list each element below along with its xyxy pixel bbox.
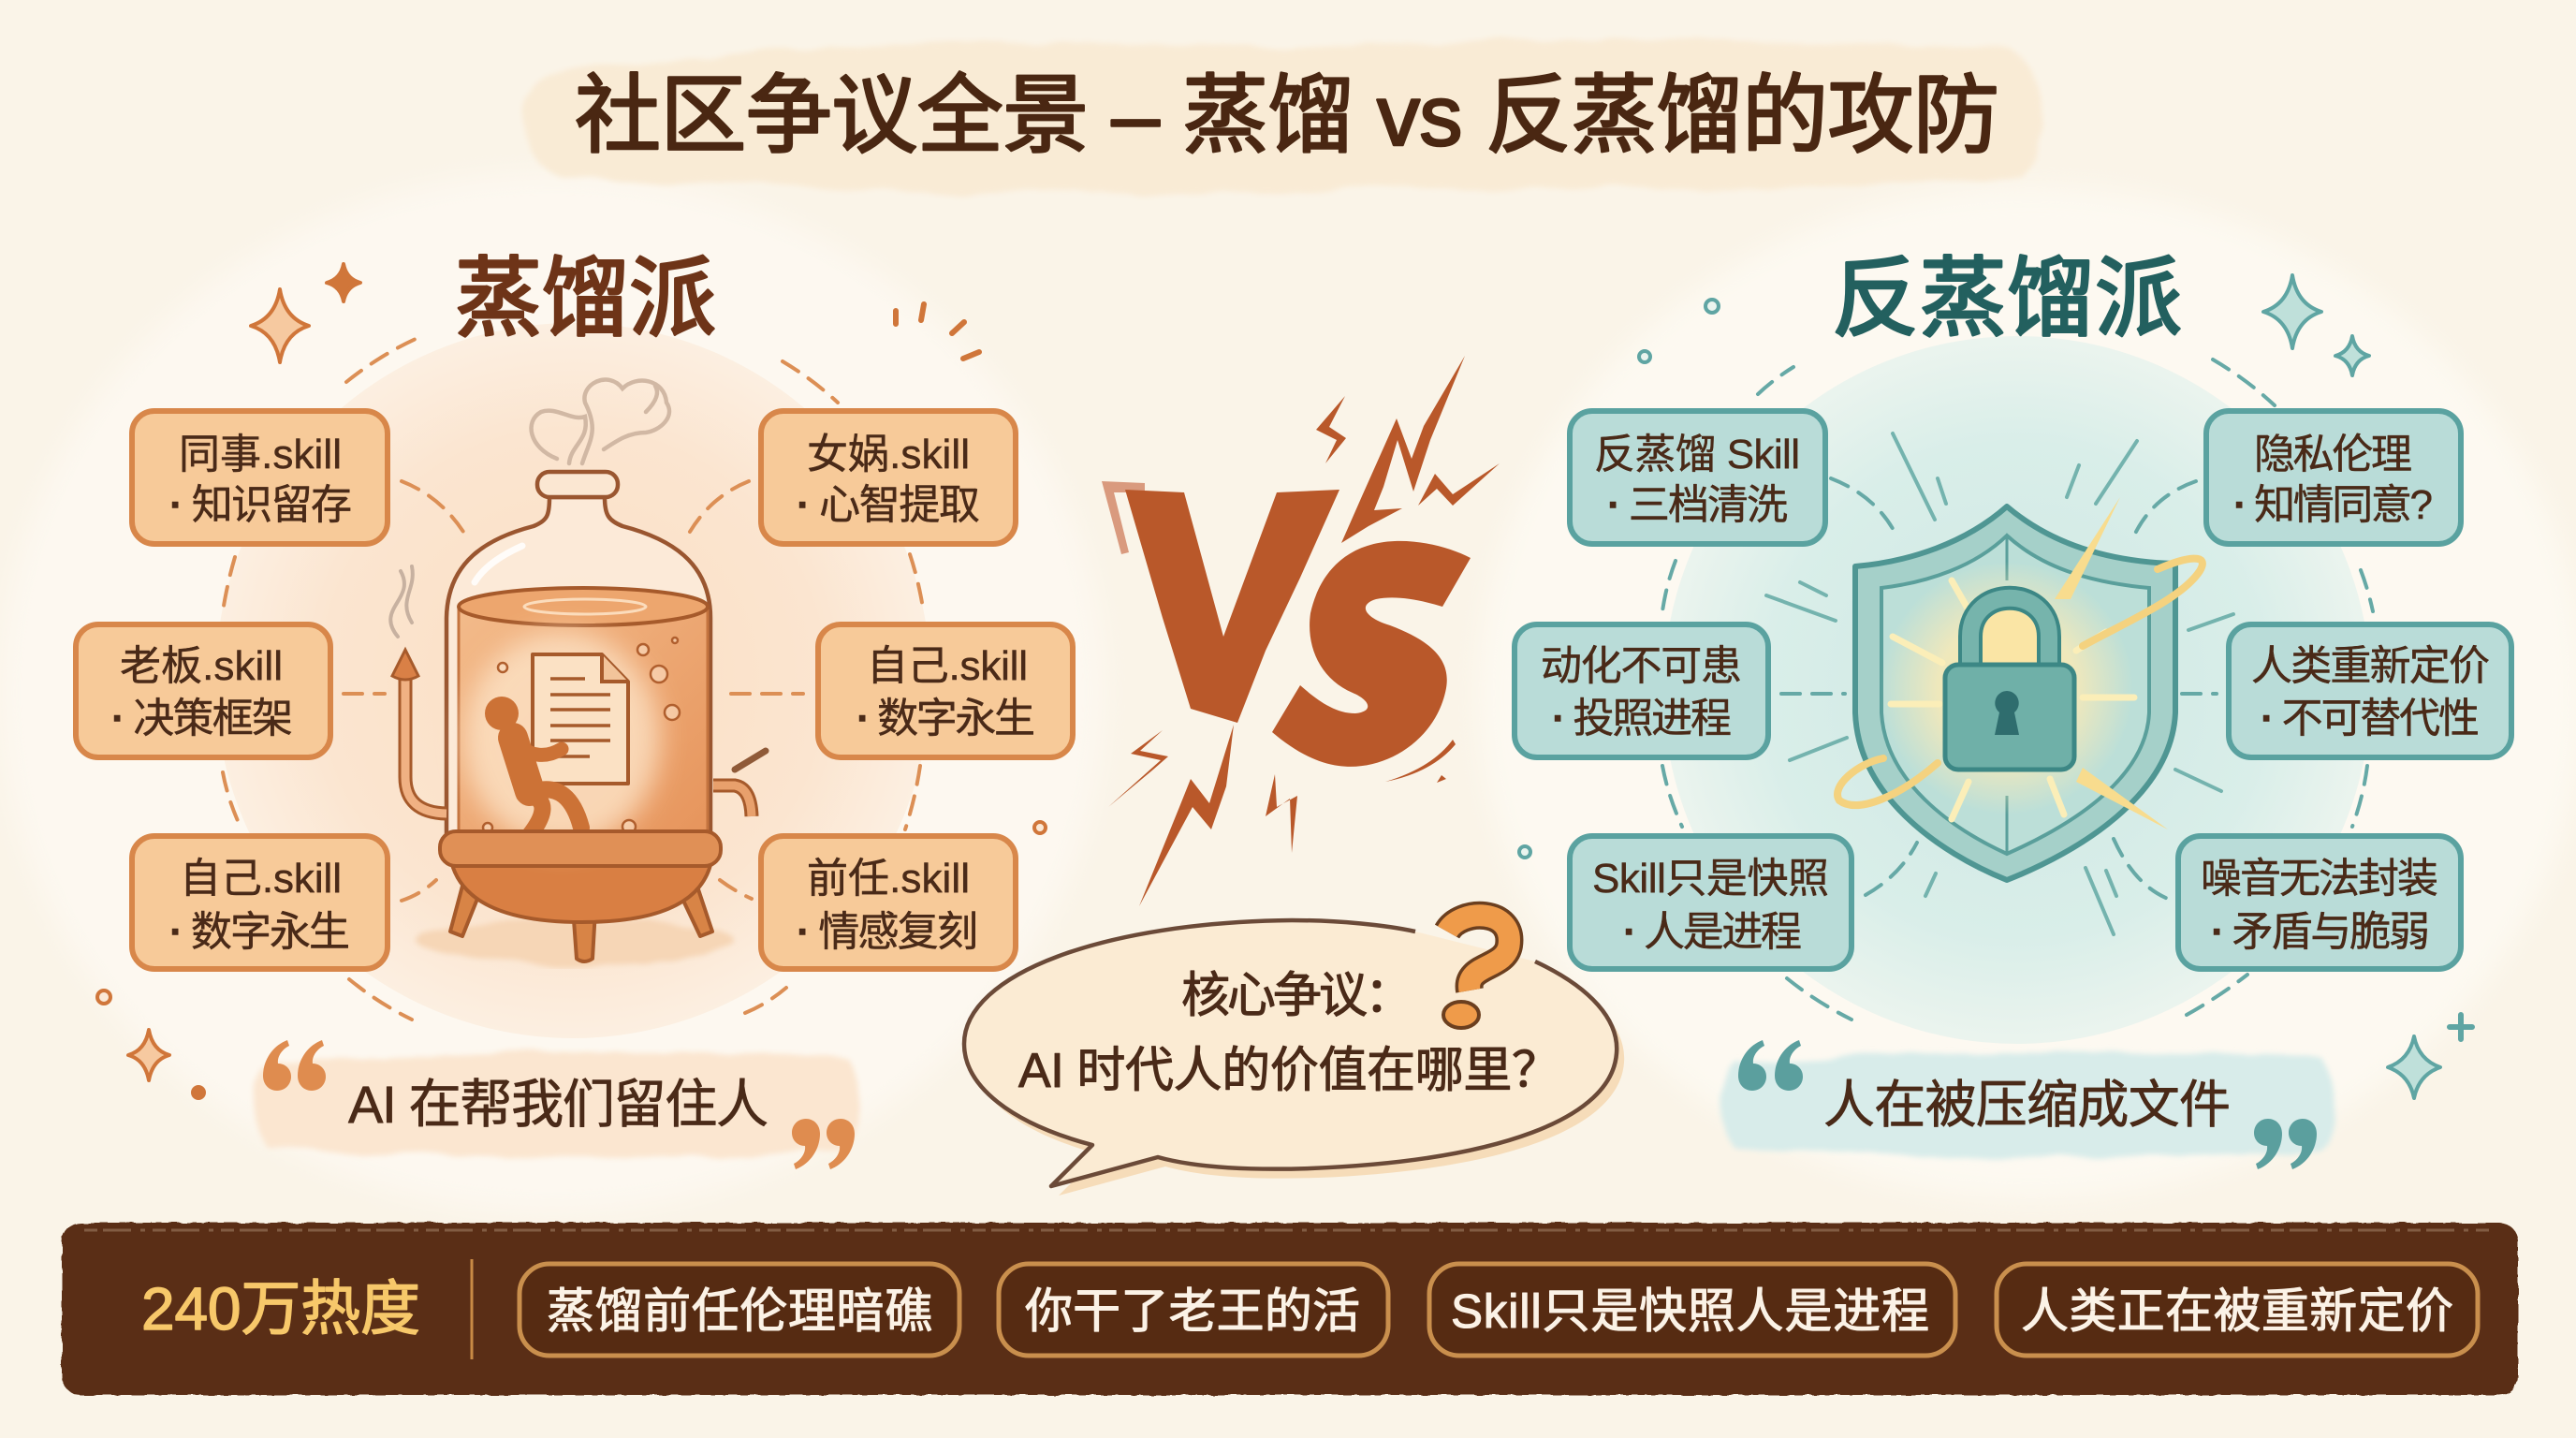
card: Skill只是快照: · 人是进程 bbox=[1623, 909, 1802, 955]
padlock body bbox=[1945, 665, 2074, 770]
card: 人类重新定价: · 不可替代性 bbox=[2261, 696, 2480, 741]
right spout bbox=[713, 785, 752, 816]
card: 自己 left: 自己.skill bbox=[180, 856, 342, 902]
stat: 240万热度: 240万热度 bbox=[141, 1275, 420, 1343]
bolt small left bbox=[1108, 730, 1168, 807]
keyhole bbox=[1995, 691, 2019, 735]
card: 反蒸馏 Skill: 反蒸馏 Skill bbox=[1594, 432, 1800, 477]
letter V bbox=[1125, 490, 1339, 723]
card: 噪音无法封装: · 矛盾与脆弱 bbox=[2211, 909, 2430, 955]
pipe cap bbox=[392, 650, 418, 680]
bolt small top bbox=[1316, 396, 1346, 463]
card: 自己 left: · 数字永生 bbox=[169, 909, 350, 955]
pill: 你干了老王的活 bbox=[999, 1264, 1388, 1356]
small steam bbox=[390, 566, 413, 637]
pill: 蒸馏前任伦理暗礁: 蒸馏前任伦理暗礁 bbox=[547, 1284, 932, 1338]
bubble fill bbox=[964, 920, 1617, 1186]
shield inner bbox=[1881, 536, 2149, 854]
card: 噪音无法封装 bbox=[2178, 836, 2461, 969]
card: 前任: · 情感复刻 bbox=[797, 909, 978, 955]
teal circle bbox=[1663, 336, 2371, 1044]
surface highlight bbox=[524, 599, 646, 614]
card: 隐私伦理: · 知情同意? bbox=[2233, 482, 2433, 528]
card: 女娲: 女娲.skill bbox=[807, 432, 970, 477]
card: 自己 right: 自己.skill bbox=[867, 643, 1028, 689]
card: 自己 right: · 数字永生 bbox=[856, 696, 1035, 741]
glow behind figure bbox=[463, 632, 660, 847]
bubbles bbox=[483, 638, 680, 833]
pill: 你干了老王的活: 你干了老王的活 bbox=[1025, 1284, 1360, 1338]
callout: core debate speech bubble bbox=[964, 916, 1624, 1196]
quote brush bbox=[255, 1053, 859, 1157]
gold orbit lower bbox=[1837, 758, 1938, 805]
sun rays bbox=[1891, 580, 2134, 819]
bubble text line 2: AI 时代人的价值在哪里？ bbox=[1018, 1044, 1560, 1098]
glass body bbox=[446, 497, 710, 843]
bolt small bottom bbox=[1266, 774, 1297, 853]
bottom hot-topics bar bbox=[62, 1223, 2518, 1395]
padlock shackle fill bbox=[1970, 598, 2049, 670]
icon: question mark bbox=[1443, 916, 1509, 1028]
flask shadow bbox=[417, 919, 736, 964]
card: 老板: · 决策框架 bbox=[111, 696, 293, 741]
peach circle bbox=[215, 323, 930, 1038]
opening quote mark bbox=[263, 1040, 326, 1091]
quote text: 人在被压缩成文件 bbox=[1823, 1076, 2231, 1134]
card: 自己 left bbox=[132, 836, 388, 969]
panel: 蒸馏派 side bbox=[76, 250, 1073, 1169]
liquid surface bbox=[459, 588, 708, 625]
title bbox=[524, 40, 2042, 194]
right spout inner bbox=[713, 785, 752, 816]
card: Skill只是快照: Skill只是快照 bbox=[1592, 856, 1829, 902]
VS emblem bbox=[1102, 356, 1500, 906]
pill: Skill只是快照人是进程: Skill只是快照人是进程 bbox=[1451, 1284, 1929, 1338]
document bbox=[533, 654, 628, 784]
title background brush bbox=[524, 40, 2042, 194]
closing quote mark bbox=[792, 1119, 855, 1169]
legs bbox=[450, 875, 712, 961]
bowl bbox=[451, 861, 711, 922]
argument cards bbox=[1515, 411, 2511, 969]
quote text: AI 在帮我们留住人 bbox=[348, 1075, 768, 1134]
card: 前任 bbox=[761, 836, 1016, 969]
pill: 人类正在被重新定价: 人类正在被重新定价 bbox=[2021, 1284, 2453, 1338]
quote brush bbox=[1720, 1053, 2334, 1157]
panel: right background wash bbox=[1479, 187, 2576, 1198]
card: 女娲: · 心智提取 bbox=[797, 482, 980, 528]
dashed orbit and connectors bbox=[1662, 360, 2373, 1020]
left pipe inner bbox=[405, 674, 446, 814]
title text: 社区争议全景 – 蒸馏 vs 反蒸馏的攻防 bbox=[575, 68, 1999, 164]
dashed orbit and connectors bbox=[223, 339, 924, 1020]
quote: 人在被压缩成文件 bbox=[1720, 1040, 2334, 1169]
shield center seam bbox=[2005, 536, 2009, 854]
gold beams bbox=[2055, 497, 2168, 829]
card: 动化不可患 bbox=[1515, 624, 1768, 757]
quote: AI 在帮我们留住人 bbox=[255, 1040, 859, 1169]
card: 动化不可患: · 投照进程 bbox=[1552, 696, 1732, 741]
bubble text line 1: 核心争议： bbox=[1181, 969, 1413, 1023]
icon: shield with padlock bbox=[1837, 497, 2203, 880]
card: 隐私伦理: 隐私伦理 bbox=[2254, 432, 2412, 477]
neck lip bbox=[537, 472, 618, 497]
corner stroke bbox=[1102, 481, 1145, 554]
card: 隐私伦理 bbox=[2206, 411, 2461, 544]
card: 同事 bbox=[132, 411, 388, 544]
base ring bbox=[440, 831, 721, 866]
pill: Skill只是快照人是进程 bbox=[1429, 1264, 1955, 1356]
shield outer bbox=[1855, 506, 2175, 880]
left pipe bbox=[405, 674, 446, 814]
lightning bottom left bbox=[1139, 725, 1234, 906]
panel: 反蒸馏派 side bbox=[1515, 250, 2511, 1169]
opening quote mark bbox=[1738, 1040, 1803, 1091]
highlight on glass bbox=[475, 546, 522, 582]
steam top bbox=[532, 380, 669, 463]
valve handle bbox=[735, 751, 766, 770]
lock glow bbox=[1881, 562, 2133, 814]
decorative sparkles bbox=[1519, 275, 2472, 1098]
heading: 反蒸馏派: 反蒸馏派 bbox=[1832, 250, 2182, 347]
pill: 蒸馏前任伦理暗礁 bbox=[520, 1264, 959, 1356]
card: 老板: 老板.skill bbox=[120, 643, 283, 689]
decorative sparkles bbox=[97, 264, 1046, 1098]
card: 反蒸馏 Skill bbox=[1570, 411, 1825, 544]
person carrying file bbox=[485, 697, 581, 835]
card: 人类重新定价 bbox=[2229, 624, 2511, 757]
skill cards bbox=[76, 411, 1073, 969]
card: 前任: 前任.skill bbox=[807, 856, 970, 902]
bubble outline bbox=[964, 920, 1617, 1186]
card: 反蒸馏 Skill: · 三档清洗 bbox=[1607, 482, 1788, 528]
card: 人类重新定价: 人类重新定价 bbox=[2251, 643, 2490, 689]
bubble shadow bbox=[972, 930, 1624, 1196]
card: 同事: · 知识留存 bbox=[169, 482, 352, 528]
padlock shackle bbox=[1970, 598, 2049, 670]
lightning top right bbox=[1341, 356, 1465, 543]
rays around shield bbox=[1766, 433, 2233, 934]
card: 动化不可患: 动化不可患 bbox=[1541, 643, 1742, 689]
bolt small right bbox=[1418, 463, 1500, 506]
pill: 人类正在被重新定价 bbox=[1997, 1264, 2478, 1356]
card: 同事: 同事.skill bbox=[179, 432, 342, 477]
panel: left background wash bbox=[0, 173, 1105, 1212]
bar background bbox=[62, 1223, 2518, 1395]
gold orbit upper bbox=[2083, 559, 2203, 646]
bar top scuff bbox=[84, 1228, 2490, 1232]
divider bbox=[470, 1259, 474, 1359]
card: 自己 right bbox=[818, 624, 1073, 757]
icon: distillation flask bbox=[390, 380, 766, 964]
card: Skill只是快照 bbox=[1570, 836, 1852, 969]
S swoosh bbox=[1385, 740, 1456, 783]
letter S bbox=[1272, 541, 1471, 767]
closing quote mark bbox=[2254, 1119, 2317, 1169]
heading: 蒸馏派: 蒸馏派 bbox=[455, 250, 716, 347]
card: 老板 bbox=[76, 624, 330, 757]
card: 女娲 bbox=[761, 411, 1016, 544]
card: 噪音无法封装: 噪音无法封装 bbox=[2201, 856, 2438, 902]
liquid bbox=[459, 607, 708, 852]
